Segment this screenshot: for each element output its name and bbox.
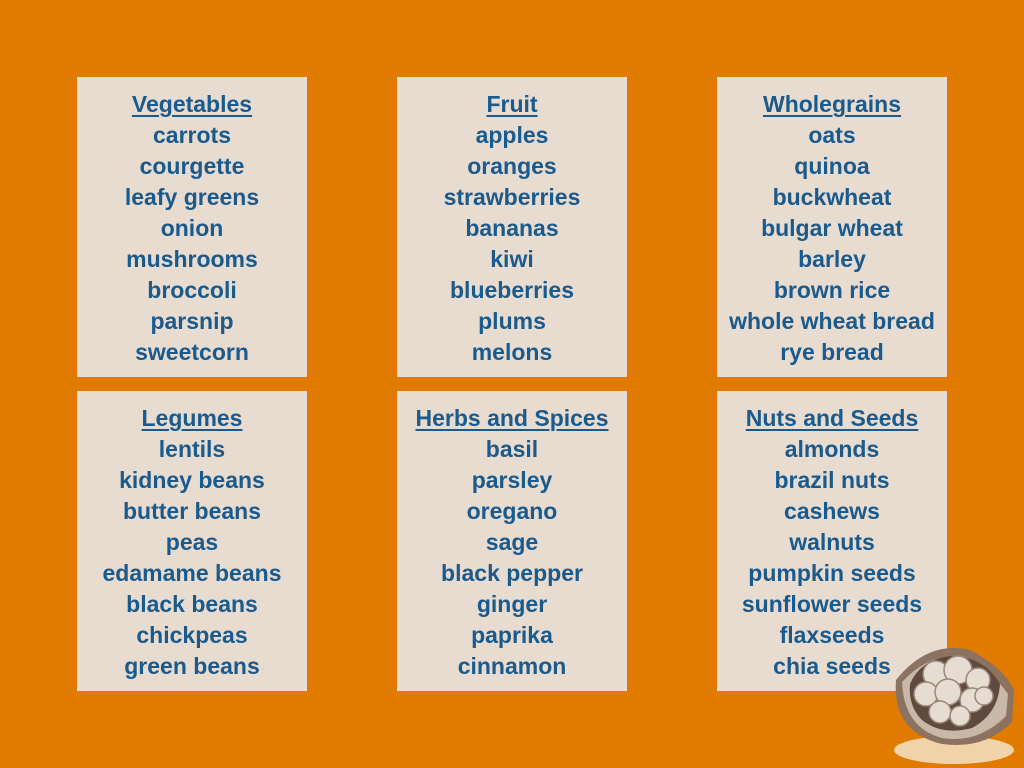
- list: wholegrains: brown rice: [774, 277, 890, 303]
- list: wholegrains: buckwheat: [773, 184, 891, 210]
- list: wholegrains: quinoa: [794, 153, 870, 179]
- heading: vegetables: Vegetables: [132, 91, 252, 117]
- list: nuts and seeds: cashews: [784, 498, 880, 524]
- list: herbs and spices: oregano: [467, 498, 557, 524]
- list: herbs and spices: black pepper: [441, 560, 583, 586]
- list: vegetables: broccoli: [147, 277, 237, 303]
- list: fruit: [444, 122, 580, 365]
- list: herbs and spices: sage: [486, 529, 538, 555]
- panel: vegetables: [77, 77, 307, 377]
- panel: nuts and seeds: [717, 391, 947, 691]
- heading: legumes: Legumes: [142, 405, 242, 431]
- list: nuts and seeds: [742, 436, 922, 679]
- list: nuts and seeds: flaxseeds: [780, 622, 884, 648]
- list: herbs and spices: ginger: [477, 591, 547, 617]
- list: legumes: green beans: [124, 653, 260, 679]
- list: legumes: [102, 436, 281, 679]
- list: herbs and spices: [441, 436, 583, 679]
- list: wholegrains: barley: [798, 246, 866, 272]
- list: vegetables: leafy greens: [125, 184, 259, 210]
- list: nuts and seeds: almonds: [785, 436, 879, 462]
- list: wholegrains: rye bread: [780, 339, 884, 365]
- heading: herbs and spices: Herbs and Spices: [415, 405, 609, 431]
- list: vegetables: courgette: [140, 153, 244, 179]
- list: wholegrains: bulgar wheat: [761, 215, 903, 241]
- panel: wholegrains: [717, 77, 947, 377]
- list: legumes: kidney beans: [119, 467, 265, 493]
- panel: legumes: [77, 391, 307, 691]
- list: nuts and seeds: pumpkin seeds: [748, 560, 916, 586]
- list: fruit: plums: [478, 308, 546, 334]
- list: vegetables: [125, 122, 259, 365]
- list: fruit: bananas: [465, 215, 559, 241]
- list: fruit: blueberries: [450, 277, 574, 303]
- list: herbs and spices: basil: [486, 436, 538, 462]
- list: nuts and seeds: brazil nuts: [774, 467, 890, 493]
- list: legumes: edamame beans: [102, 560, 281, 586]
- list: legumes: black beans: [126, 591, 258, 617]
- list: legumes: peas: [166, 529, 218, 555]
- list: wholegrains: whole wheat bread: [729, 308, 935, 334]
- list: vegetables: sweetcorn: [135, 339, 249, 365]
- list: nuts and seeds: walnuts: [789, 529, 875, 555]
- list: fruit: oranges: [467, 153, 557, 179]
- list: vegetables: carrots: [153, 122, 231, 148]
- panel: fruit: [397, 77, 627, 377]
- list: herbs and spices: paprika: [471, 622, 553, 648]
- list: herbs and spices: cinnamon: [458, 653, 566, 679]
- list: legumes: lentils: [159, 436, 225, 462]
- list: fruit: strawberries: [444, 184, 580, 210]
- heading: nuts and seeds: Nuts and Seeds: [746, 405, 918, 431]
- icon: walnut: [894, 648, 1014, 764]
- heading: fruit: Fruit: [486, 91, 538, 117]
- list: legumes: butter beans: [123, 498, 261, 524]
- list: vegetables: onion: [161, 215, 223, 241]
- heading: wholegrains: Wholegrains: [763, 91, 901, 117]
- list: herbs and spices: parsley: [472, 467, 552, 493]
- list: legumes: chickpeas: [136, 622, 248, 648]
- list: nuts and seeds: chia seeds: [773, 653, 891, 679]
- panel: herbs and spices: [397, 391, 627, 691]
- list: fruit: apples: [476, 122, 548, 148]
- list: vegetables: parsnip: [150, 308, 234, 334]
- list: vegetables: mushrooms: [126, 246, 258, 272]
- list: wholegrains: oats: [808, 122, 856, 148]
- list: fruit: melons: [472, 339, 552, 365]
- list: nuts and seeds: sunflower seeds: [742, 591, 922, 617]
- list: wholegrains: [729, 122, 935, 365]
- list: fruit: kiwi: [490, 246, 534, 272]
